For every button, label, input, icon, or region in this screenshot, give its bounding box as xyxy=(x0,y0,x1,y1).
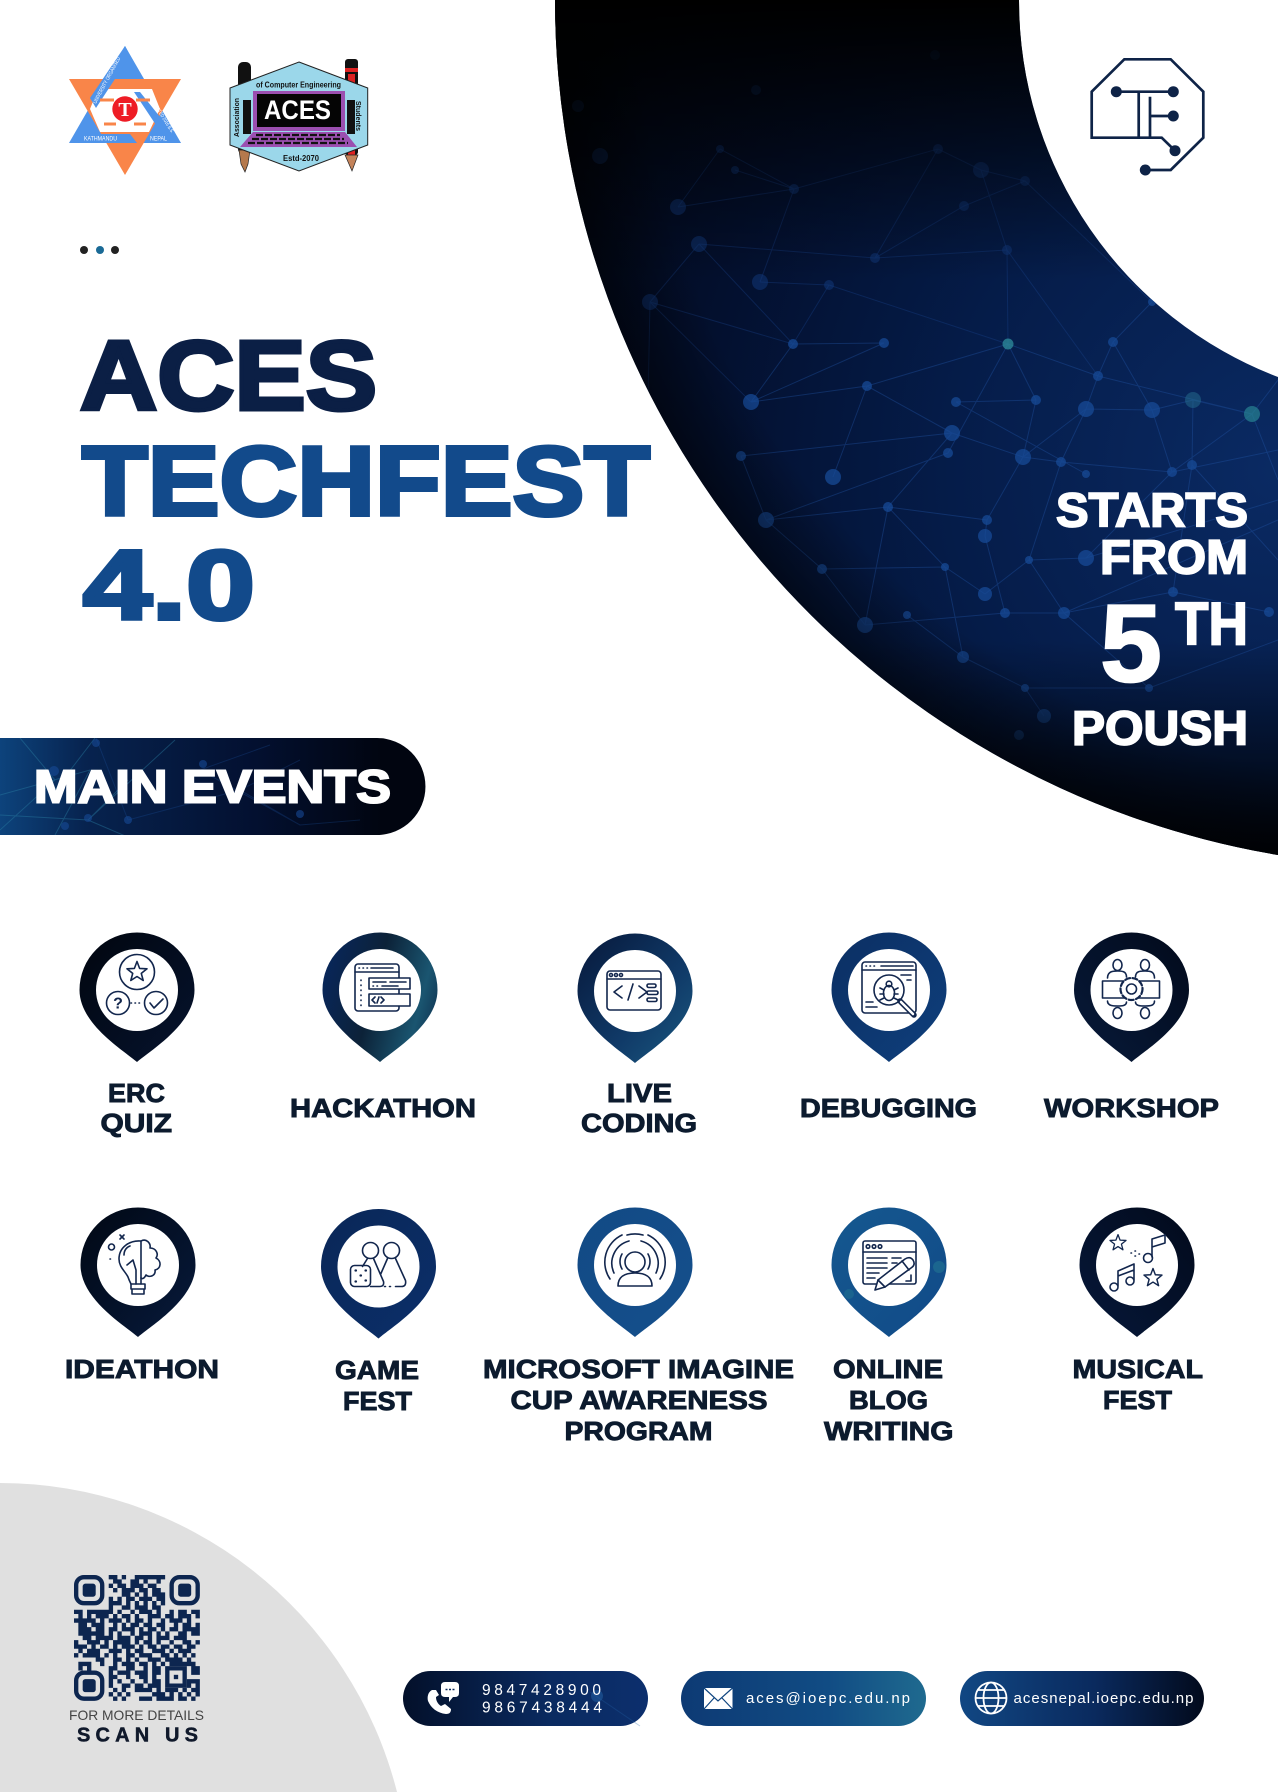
pin xyxy=(322,932,438,1062)
logo: Tribhuvan University xyxy=(69,46,181,175)
logo: Tribhuvan University: KATHMANDU xyxy=(84,136,117,142)
logo: TE circuit octagon xyxy=(1092,59,1203,175)
contact: website xyxy=(960,1671,1204,1726)
label: FEST xyxy=(343,1386,412,1416)
event: Debugging xyxy=(800,932,977,1123)
pin xyxy=(1074,932,1189,1062)
pin xyxy=(578,933,692,1063)
label: WRITING xyxy=(824,1416,954,1446)
label: GAME xyxy=(335,1355,419,1385)
pin xyxy=(1080,1207,1194,1337)
label xyxy=(100,1078,172,1138)
logo: ACES: Association xyxy=(232,98,241,137)
label: LIVE xyxy=(607,1078,672,1108)
scan caption xyxy=(69,1707,204,1746)
logo: Tribhuvan University: INCORPORATED 2016 B.S. xyxy=(143,89,175,134)
pin xyxy=(578,1207,692,1337)
logo: Tribhuvan University: UNIVERSITY ORGANISED xyxy=(92,56,122,105)
label xyxy=(824,1354,954,1446)
event: Game Fest xyxy=(321,1209,436,1416)
date callout xyxy=(1056,484,1248,756)
pin xyxy=(321,1209,436,1338)
label: MUSICAL xyxy=(1072,1354,1203,1384)
date callout: STARTS xyxy=(1056,484,1248,538)
logo: Tribhuvan University: T xyxy=(118,99,132,121)
pencil xyxy=(345,59,358,171)
event: Live Coding xyxy=(578,933,697,1138)
logo: ACES: Estd-2070 xyxy=(283,154,320,163)
main events banner: MAIN EVENTS xyxy=(34,760,391,812)
title: 4.0 xyxy=(83,530,255,640)
pin xyxy=(832,1207,946,1337)
contact: website: acesnepal.ioepc.edu.np xyxy=(1014,1690,1194,1707)
event: Workshop xyxy=(1044,932,1219,1123)
logo: ACES: ACES xyxy=(264,95,331,125)
contact: phone: 9847428900 xyxy=(482,1682,601,1699)
label: PROGRAM xyxy=(564,1416,712,1446)
event: ERC Quiz xyxy=(80,932,194,1138)
title xyxy=(80,320,650,640)
label: HACKATHON xyxy=(290,1093,476,1123)
event: Online Blog Writing xyxy=(824,1207,954,1446)
icon: globe xyxy=(976,1682,1006,1714)
contact: email xyxy=(681,1671,926,1726)
label: BLOG xyxy=(849,1385,928,1415)
main events banner xyxy=(0,738,425,838)
logo: Tribhuvan University: NEPAL xyxy=(150,136,167,142)
title: ACES xyxy=(80,320,377,430)
label: ONLINE xyxy=(833,1354,943,1384)
label: ERC xyxy=(108,1078,165,1108)
date callout: 5 xyxy=(1100,582,1162,706)
label: FEST xyxy=(1103,1385,1172,1415)
pin xyxy=(80,1207,196,1337)
contact: phone xyxy=(403,1671,648,1726)
logo: ACES xyxy=(230,59,368,172)
event: Musical Fest xyxy=(1072,1207,1203,1415)
label xyxy=(335,1355,419,1416)
label xyxy=(581,1078,697,1138)
label: IDEATHON xyxy=(65,1354,219,1384)
icon: phone with speech bubble xyxy=(428,1682,459,1714)
network lines, lower xyxy=(741,302,1278,716)
contact: email: aces@ioepc.edu.np xyxy=(746,1690,910,1707)
icon: envelope xyxy=(704,1688,732,1709)
event: Ideathon xyxy=(65,1207,219,1384)
label xyxy=(483,1354,794,1446)
label: DEBUGGING xyxy=(800,1093,977,1123)
logo: ACES: Students xyxy=(354,101,363,131)
contact: phone: 9867438444 xyxy=(482,1700,602,1716)
logo: ACES: of Computer Engineering xyxy=(256,80,341,90)
QR code xyxy=(74,1577,200,1699)
scan caption: FOR MORE DETAILS xyxy=(69,1707,204,1723)
date callout: FROM xyxy=(1100,532,1248,584)
decorative dots xyxy=(80,246,119,254)
date callout: TH xyxy=(1175,590,1248,658)
panel: grey corner with QR xyxy=(0,1483,397,1792)
title: TECHFEST xyxy=(82,426,650,536)
pin xyxy=(80,932,194,1062)
panel: dark network arc xyxy=(540,0,1278,860)
pin xyxy=(832,932,946,1062)
label: MICROSOFT IMAGINE xyxy=(483,1354,794,1384)
label: WORKSHOP xyxy=(1044,1093,1219,1123)
date callout: POUSH xyxy=(1072,702,1248,756)
label xyxy=(1072,1354,1203,1415)
label: CUP AWARENESS xyxy=(510,1385,768,1415)
label: CODING xyxy=(581,1108,697,1138)
event: Microsoft Imagine Cup Awareness Program xyxy=(483,1207,794,1446)
scan caption: SCAN US xyxy=(77,1724,198,1746)
network lines, upper xyxy=(648,149,1152,402)
pen xyxy=(238,62,251,172)
pin: ? xyxy=(113,996,123,1012)
event: Hackathon xyxy=(290,932,476,1123)
label: QUIZ xyxy=(100,1108,172,1138)
